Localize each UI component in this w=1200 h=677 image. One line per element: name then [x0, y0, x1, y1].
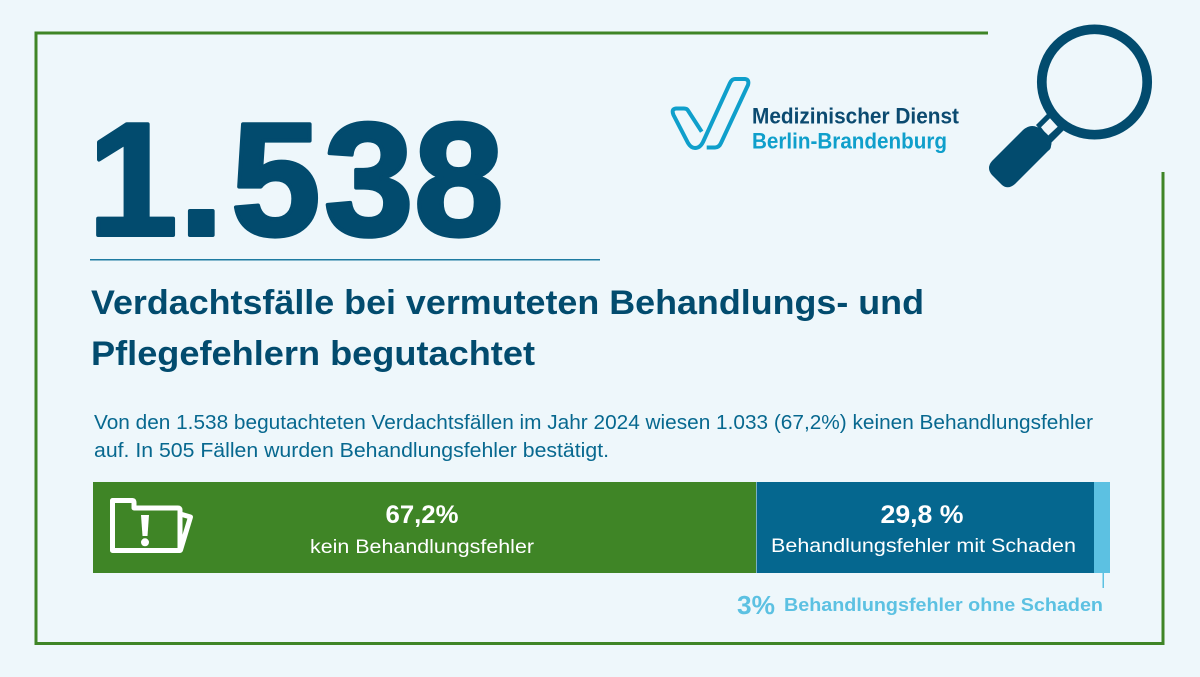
- callout: 3% Behandlungsfehler ohne Schaden: 3%: [737, 590, 775, 620]
- segment: Behandlungsfehler mit Schaden: 29,8 %: [880, 501, 964, 529]
- segment: Behandlungsfehler mit Schaden: Behandlungsfehler mit Schaden: [771, 536, 1076, 557]
- heading: [91, 284, 924, 373]
- segment: kein Behandlungsfehler: kein Behandlungsfehler: [310, 537, 535, 558]
- icon: folder with exclamation mark: [112, 500, 190, 550]
- callout tick: [1102, 573, 1104, 588]
- segment: kein Behandlungsfehler: [93, 482, 756, 573]
- heading: Verdachtsfälle bei vermuteten Behandlungs- und: [91, 284, 924, 322]
- logo line 1: Medizinischer Dienst: [752, 104, 960, 128]
- icon: logo check mark: [673, 79, 748, 148]
- segment: Behandlungsfehler mit Schaden: [756, 482, 1094, 573]
- body text: Von den 1.538 begutachteten Verdachtsfällen im Jahr 2024 wiesen 1.033 (67,2%) keinen Behandlungsfehler: [94, 412, 1093, 434]
- body text: auf. In 505 Fällen wurden Behandlungsfehler bestätigt.: [94, 440, 609, 462]
- callout: 3% Behandlungsfehler ohne Schaden: Behandlungsfehler ohne Schaden: [784, 594, 1103, 615]
- heading: Pflegefehlern begutachtet: [91, 335, 535, 373]
- big number: 1.538: [88, 90, 504, 270]
- stacked bar chart: [93, 482, 1110, 573]
- callout: 3% Behandlungsfehler ohne Schaden: [737, 590, 1103, 620]
- logo: Medizinischer Dienst Berlin-Brandenburg: [673, 79, 960, 154]
- segment: kein Behandlungsfehler: 67,2%: [386, 501, 458, 529]
- body text: [94, 412, 1093, 462]
- icon: magnifying glass: [989, 29, 1147, 187]
- segment: Behandlungsfehler ohne Schaden: [1094, 482, 1110, 573]
- logo line 2: Berlin-Brandenburg: [752, 128, 947, 154]
- divider under number: [90, 259, 600, 260]
